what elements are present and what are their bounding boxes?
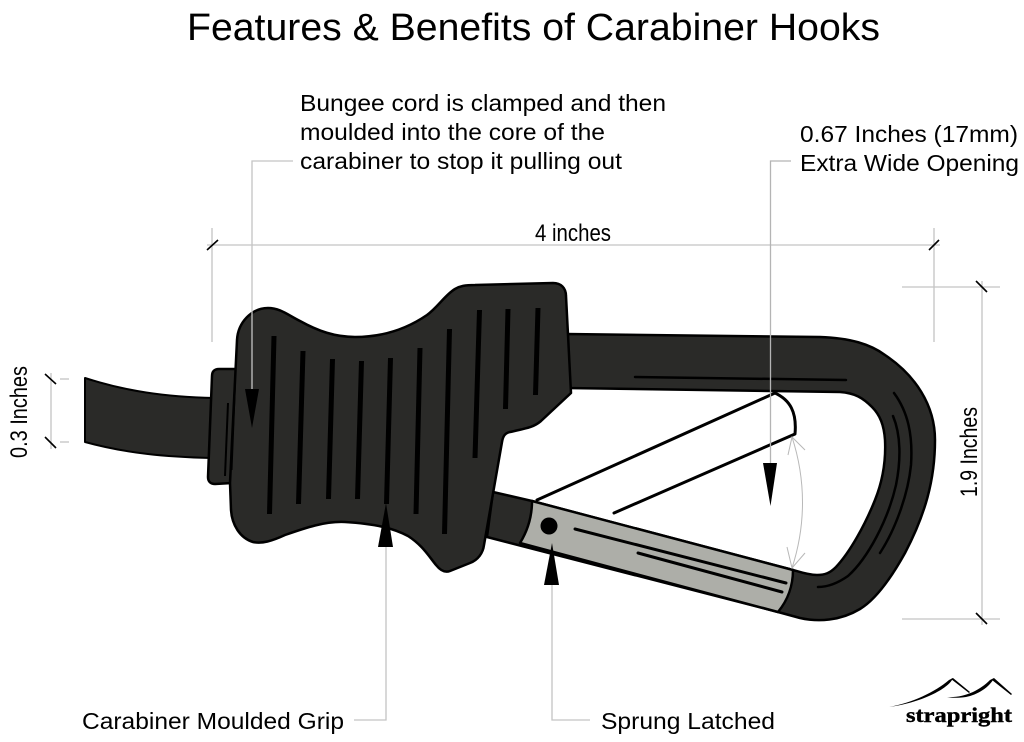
arrow: latch [544,543,559,585]
title: Features & Benefits of Carabiner Hooks [187,7,880,49]
callout: sprung latched [544,543,775,734]
callout: sprung latched: Sprung Latched [601,708,775,734]
callout: bungee cord: Bungee cord is clamped and then [300,90,666,116]
latch lines [575,529,786,592]
callout: extra wide opening: Extra Wide Opening [800,150,1019,176]
bungee cord [85,378,214,458]
latch rivet [540,518,558,534]
callout: extra wide opening: 0.67 Inches (17mm) [800,121,1018,147]
carabiner illustration [85,283,935,620]
dimension: 4 inches: 4 inches [535,220,611,247]
dimension: 1.9 inches: 1.9 Inches [956,407,983,497]
callout: bungee cord: moulded into the core of the [300,119,605,145]
hook body [487,334,935,620]
arrow: opening [763,463,777,506]
logo: strapright: strapright [906,703,1012,727]
callout: bungee cord [245,90,666,428]
opening arc arrow [787,437,805,568]
callout: carabiner moulded grip [82,503,393,734]
dimension: 0.3 inches: 0.3 Inches [6,366,33,458]
arrow: bungee cord [245,389,259,428]
open gate position [537,393,795,513]
moulded grip with collar [208,283,571,572]
dimension: 1.9 inches [902,281,1000,625]
callout: extra wide opening [763,121,1019,506]
grip ridges [224,308,540,534]
dimension: 4 inches [207,220,940,342]
callout: carabiner moulded grip: Carabiner Moulded Grip [82,708,344,734]
logo: strapright [889,678,1012,727]
sprung latch gate: silver bar [520,501,793,612]
hook highlight lines [635,377,911,587]
arrow: grip [378,503,393,547]
callout: bungee cord: carabiner to stop it pulling out [300,148,622,174]
dimension: 0.3 inches [6,366,69,458]
logo mountains [889,678,1012,707]
